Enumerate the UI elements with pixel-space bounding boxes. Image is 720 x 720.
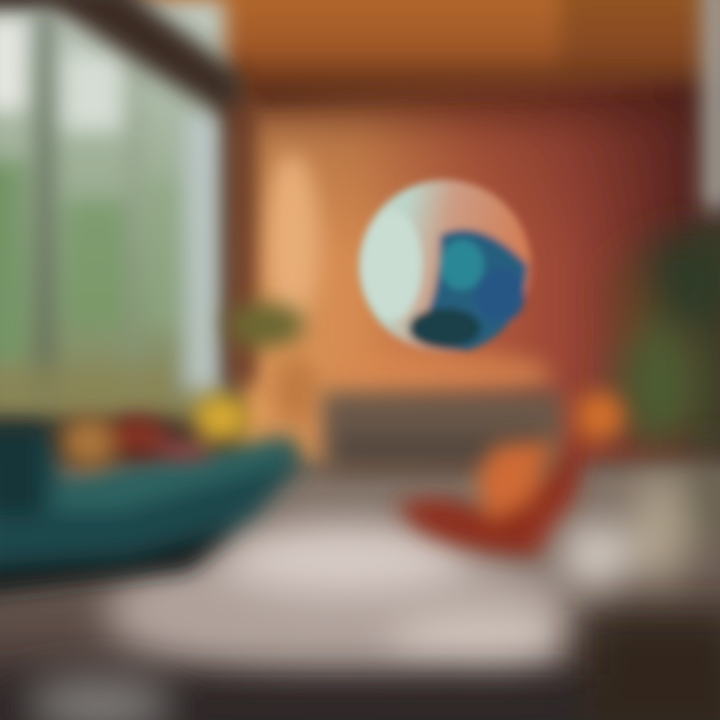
right edge strip [692,0,720,455]
wall disc artwork [359,180,531,352]
low bench [322,392,562,474]
plant on right [612,232,720,450]
window frame beam [0,0,256,385]
white side cloth and vase [557,450,720,591]
rug [105,519,575,685]
dark foreground floor [0,610,720,720]
floor [0,465,720,720]
wall [240,70,720,470]
plant by window [225,303,318,424]
window [0,0,225,420]
lounge chair [395,392,624,555]
sofa cushions [60,394,250,468]
ceiling [110,0,720,105]
sofa [0,425,305,595]
